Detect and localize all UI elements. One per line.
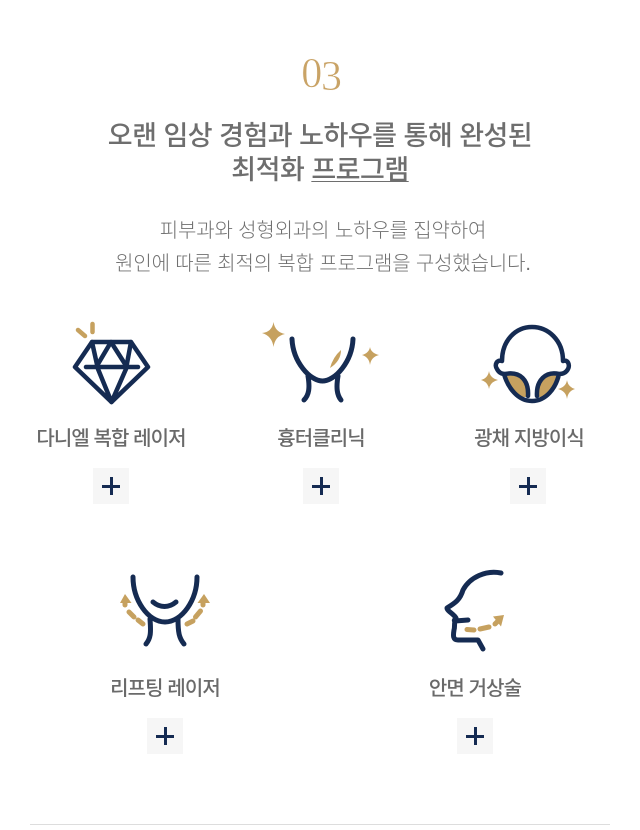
title	[108, 121, 532, 185]
plus button	[147, 718, 183, 754]
item: diamond laser	[36, 322, 186, 504]
description: 피부과와 성형외과의 노하우를 집약하여	[160, 220, 486, 242]
item: filler clinic	[262, 322, 379, 504]
description	[115, 220, 531, 275]
icon: face profile	[444, 570, 504, 652]
label: 흉터클리닉	[277, 428, 365, 450]
section number: 03	[301, 51, 341, 100]
plus button	[510, 468, 546, 504]
title: 최적화 프로그램	[231, 155, 409, 185]
item: facial contouring	[429, 570, 522, 754]
icon: jaw lifting	[120, 574, 210, 646]
label: 안면 거상술	[429, 678, 521, 700]
icon: chin with sparkles	[262, 322, 379, 402]
label: 리프팅 레이저	[110, 678, 220, 700]
plus button	[303, 468, 339, 504]
item: lifting laser	[110, 574, 220, 754]
label: 다니엘 복합 레이저	[36, 428, 186, 450]
item: fat removal	[474, 324, 584, 504]
title: 오랜 임상 경험과 노하우를 통해 완성된	[108, 121, 532, 151]
plus button	[93, 468, 129, 504]
label: 광채 지방이식	[474, 428, 584, 450]
icon: head with fat pads	[481, 324, 575, 404]
plus button	[457, 718, 493, 754]
description: 원인에 따른 최적의 복합 프로그램을 구성했습니다.	[115, 253, 531, 275]
icon: diamond	[72, 322, 150, 404]
